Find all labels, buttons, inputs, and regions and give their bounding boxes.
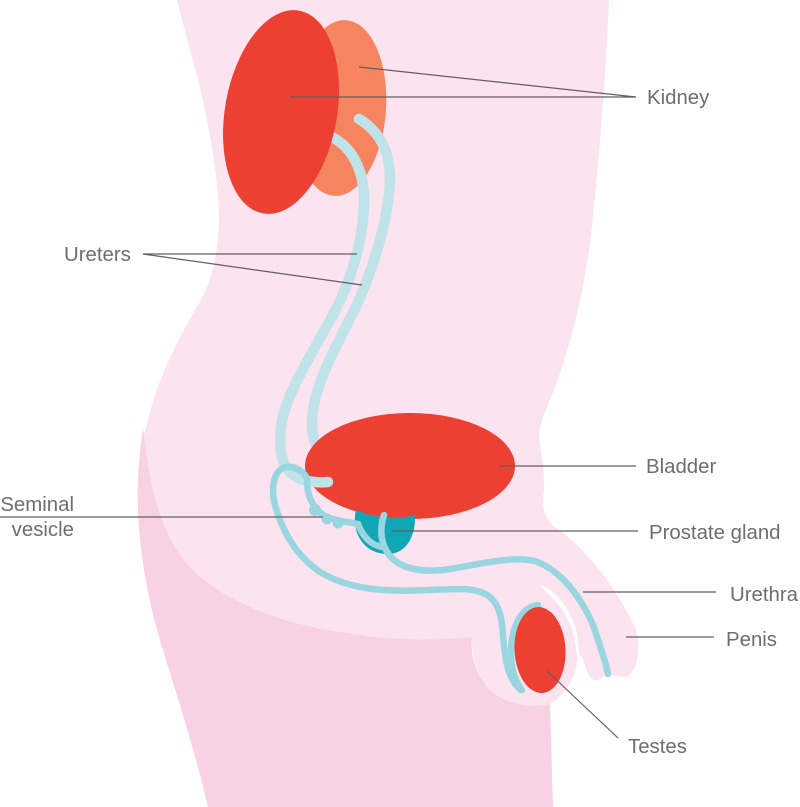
label: Seminal vesicle: vesicle bbox=[12, 519, 74, 541]
body silhouette bbox=[138, 0, 638, 807]
leader lines bbox=[0, 67, 716, 738]
kidney front bbox=[208, 1, 354, 223]
vas deferens bbox=[273, 467, 521, 690]
epididymis bbox=[511, 605, 538, 690]
label: Prostate gland: Prostate gland bbox=[649, 522, 780, 544]
ureter right bbox=[312, 119, 390, 445]
left ureter end over bladder bbox=[300, 479, 328, 482]
label: Penis: Penis bbox=[726, 629, 777, 651]
label: Testes: Testes bbox=[628, 736, 687, 758]
label: Seminal vesicle: Seminal bbox=[0, 494, 74, 516]
urethra bbox=[381, 515, 608, 674]
label: Urethra: Urethra bbox=[730, 584, 799, 606]
seminal vesicle bbox=[307, 480, 382, 547]
kidney back bbox=[288, 17, 392, 199]
white gap between scrotum and penis bbox=[540, 585, 579, 658]
bladder bbox=[305, 413, 515, 519]
label: Ureters: Ureters bbox=[64, 244, 131, 266]
prostate gland bbox=[355, 510, 415, 554]
label: Kidney: Kidney bbox=[647, 87, 710, 109]
lower body shading bbox=[138, 428, 553, 807]
testes bbox=[512, 606, 568, 694]
label: Bladder: Bladder bbox=[646, 456, 716, 478]
ureter left bbox=[280, 135, 364, 482]
